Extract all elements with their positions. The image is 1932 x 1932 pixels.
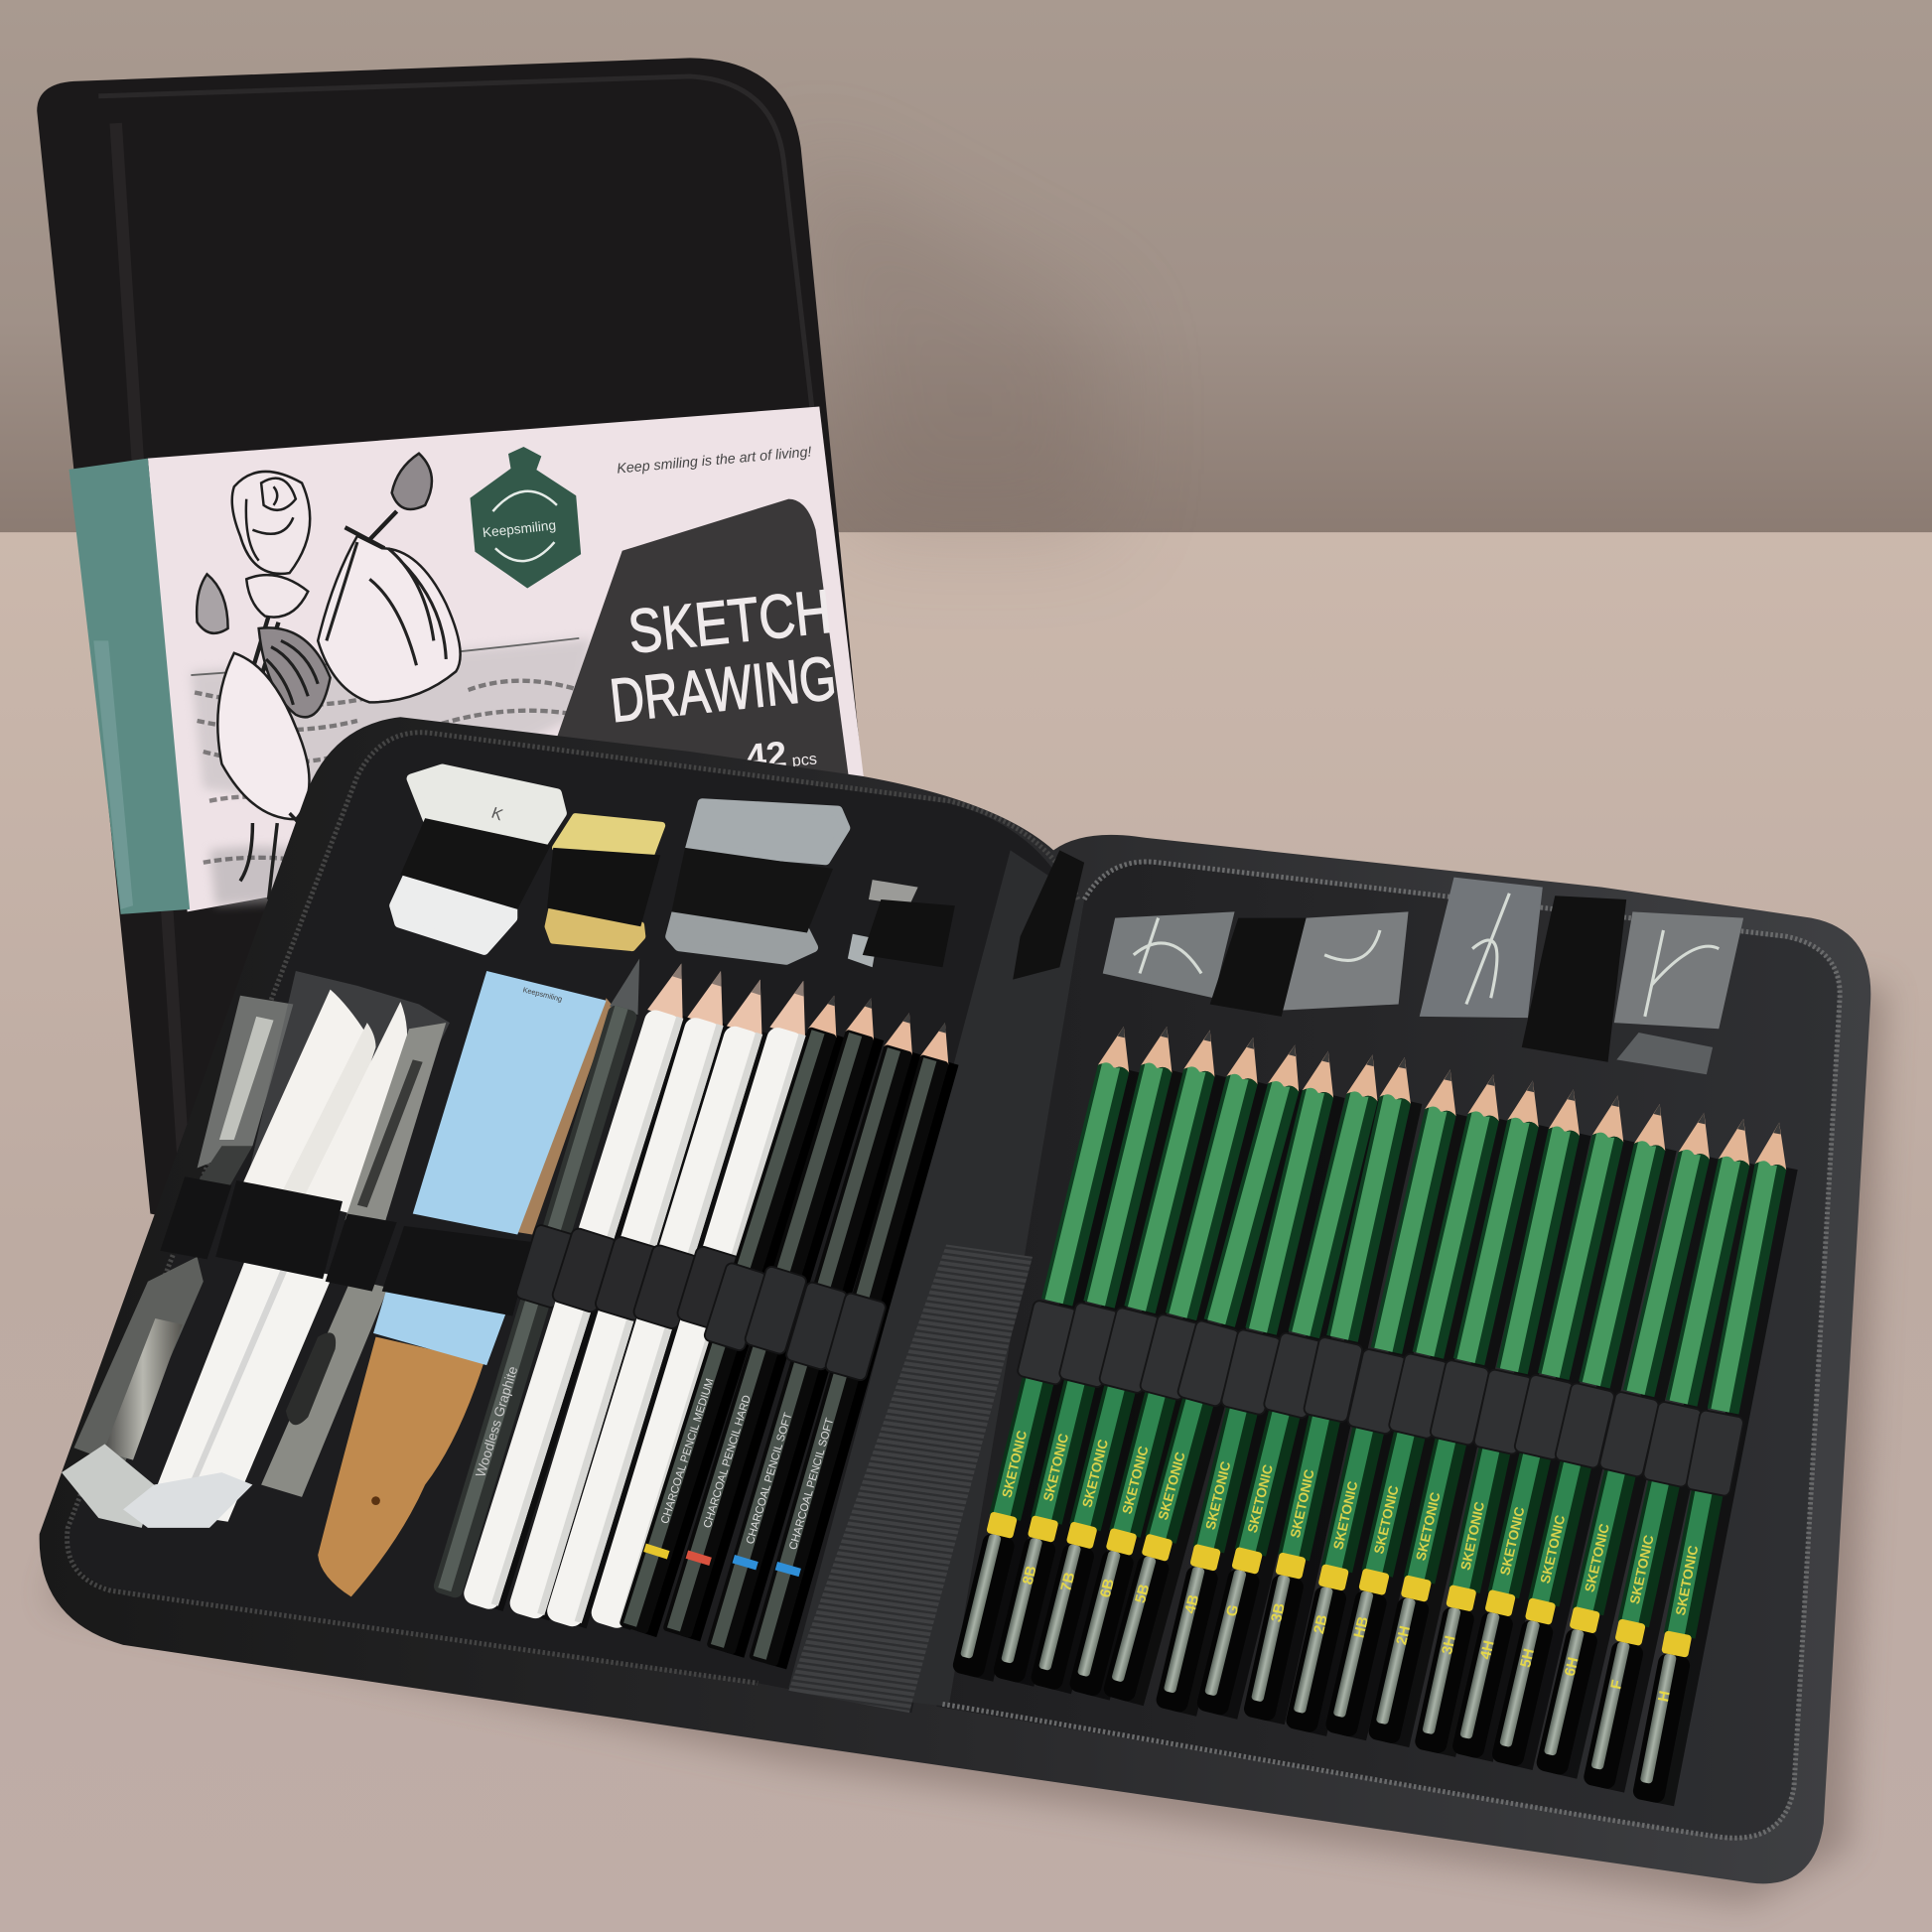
colour band bbox=[643, 1544, 669, 1559]
left inner panel bbox=[69, 735, 1072, 1713]
colour band bbox=[686, 1550, 712, 1566]
label 14: SKETONIC bbox=[1538, 1514, 1568, 1585]
grade 3: 7B bbox=[1058, 1571, 1078, 1593]
label 11: SKETONIC bbox=[1413, 1490, 1444, 1562]
grade 11: 2H bbox=[1394, 1624, 1414, 1646]
background: table bbox=[0, 532, 1932, 1932]
grade 9: 2B bbox=[1311, 1613, 1331, 1635]
grade 5: 5B bbox=[1133, 1583, 1154, 1605]
background: wall bbox=[0, 0, 1932, 535]
green pencil 15 bbox=[1529, 1108, 1730, 1779]
grade 12: 3H bbox=[1440, 1634, 1459, 1656]
green pencil 6 bbox=[1149, 1045, 1354, 1717]
grade 14: 5H bbox=[1518, 1647, 1538, 1669]
pack straps bbox=[1210, 918, 1307, 1017]
sanding block brand: Keepsmiling bbox=[522, 985, 563, 1004]
right inner panel bbox=[936, 864, 1839, 1838]
yellow eraser bbox=[547, 817, 661, 947]
grade 10: HB bbox=[1351, 1615, 1372, 1640]
label 16: SKETONIC bbox=[1627, 1534, 1657, 1605]
label 9: SKETONIC bbox=[1330, 1479, 1360, 1551]
title: SKETCH: SKETCH bbox=[625, 578, 835, 667]
grade 2: 8B bbox=[1021, 1564, 1040, 1587]
ribbed pocket strap bbox=[788, 1244, 1033, 1713]
green pencil 1 bbox=[945, 1022, 1150, 1682]
grade 6: 4B bbox=[1182, 1593, 1202, 1615]
lead holder in plastic sleeve bbox=[62, 996, 293, 1528]
tagline: Keep smiling is the art of living! bbox=[617, 444, 812, 478]
graphite pencil bbox=[426, 952, 659, 1601]
grade 4: 6B bbox=[1098, 1577, 1118, 1599]
charcoal pencil: medium bbox=[613, 989, 858, 1637]
zipper pull bbox=[1013, 850, 1084, 980]
paper blending stumps bbox=[123, 971, 450, 1528]
white eraser bbox=[394, 768, 562, 950]
label 6: SKETONIC bbox=[1203, 1459, 1234, 1531]
green pencil 3 bbox=[1024, 1025, 1236, 1694]
green pencil 14 bbox=[1484, 1099, 1686, 1770]
colour band bbox=[775, 1562, 801, 1577]
white pencil 2 bbox=[502, 964, 745, 1623]
grey eraser bbox=[670, 803, 845, 960]
charcoal pencil: extra soft bbox=[743, 1017, 969, 1669]
grade 17: H bbox=[1655, 1690, 1674, 1704]
pencil text: CHARCOAL PENCIL SOFT bbox=[787, 1417, 836, 1551]
pencil text: CHARCOAL PENCIL SOFT bbox=[745, 1412, 794, 1546]
pencil text: CHARCOAL PENCIL HARD bbox=[702, 1394, 754, 1530]
shadow behind notebook bbox=[788, 148, 1109, 535]
paper sleeve bbox=[148, 407, 865, 911]
title: DRAWING: DRAWING bbox=[607, 644, 839, 736]
green pencil 13 bbox=[1445, 1090, 1644, 1762]
green pencil 11 bbox=[1361, 1075, 1560, 1747]
grade 16: F bbox=[1607, 1678, 1626, 1691]
craft knife bbox=[261, 1023, 446, 1497]
green pencil 9 bbox=[1279, 1064, 1476, 1736]
label 10: SKETONIC bbox=[1371, 1484, 1402, 1556]
shadow under open case bbox=[50, 986, 1885, 1903]
charcoal pencil: hard bbox=[656, 992, 895, 1641]
spine centre bbox=[788, 850, 1084, 1707]
green pencil 5 bbox=[1096, 1039, 1321, 1706]
sanding block bbox=[318, 971, 613, 1596]
grade 15: 6H bbox=[1563, 1656, 1583, 1678]
label 7: SKETONIC bbox=[1245, 1463, 1276, 1534]
notebook: closed black case with paper sleeve bbox=[37, 58, 865, 1232]
label 12: SKETONIC bbox=[1458, 1500, 1487, 1572]
teal sleeve spine bbox=[69, 459, 190, 914]
dark title label bbox=[552, 499, 850, 788]
zipper bbox=[68, 733, 1840, 1838]
colour band bbox=[733, 1555, 759, 1570]
pencil sharpener bbox=[848, 880, 955, 967]
rose sketch illustration bbox=[191, 454, 592, 905]
green pencil 17 bbox=[1625, 1118, 1806, 1806]
grade 7: G bbox=[1224, 1603, 1242, 1618]
logo text: Keepsmiling bbox=[482, 517, 557, 540]
label 15: SKETONIC bbox=[1582, 1522, 1612, 1593]
label 4: SKETONIC bbox=[1119, 1445, 1152, 1516]
label 1: SKETONIC bbox=[999, 1429, 1030, 1499]
elastic strap: left tools bbox=[160, 1176, 532, 1315]
eraser mark: K bbox=[489, 804, 505, 824]
label 17: SKETONIC bbox=[1673, 1544, 1701, 1616]
label 3: SKETONIC bbox=[1079, 1438, 1111, 1509]
white pencil 1 bbox=[457, 956, 705, 1613]
green pencil 8 bbox=[1236, 1052, 1431, 1725]
graphite pencil label: Woodless Graphite bbox=[473, 1365, 520, 1479]
label 13: SKETONIC bbox=[1497, 1505, 1528, 1577]
grade 8: 3B bbox=[1269, 1601, 1289, 1623]
logo badge bbox=[470, 446, 582, 589]
open zip case bbox=[40, 717, 1870, 1883]
white pencil 4 bbox=[584, 974, 827, 1632]
label 8: SKETONIC bbox=[1288, 1467, 1317, 1539]
piece count: 42pcs bbox=[744, 731, 818, 778]
green pencil 10 bbox=[1318, 1069, 1520, 1740]
label 5: SKETONIC bbox=[1156, 1450, 1188, 1522]
charcoal foil packs bbox=[1103, 878, 1743, 1074]
green pencil 2 bbox=[986, 1022, 1193, 1687]
green pencil 16 bbox=[1577, 1114, 1770, 1793]
green pencil 12 bbox=[1408, 1084, 1600, 1757]
pencil text: CHARCOAL PENCIL MEDIUM bbox=[659, 1377, 717, 1525]
charcoal pencil: soft bbox=[700, 1007, 933, 1658]
green pencil 4 bbox=[1062, 1032, 1280, 1701]
green pencil 7 bbox=[1189, 1049, 1399, 1720]
grade 13: 4H bbox=[1478, 1639, 1498, 1661]
label 2: SKETONIC bbox=[1040, 1432, 1071, 1503]
white pencil 3 bbox=[540, 973, 783, 1631]
